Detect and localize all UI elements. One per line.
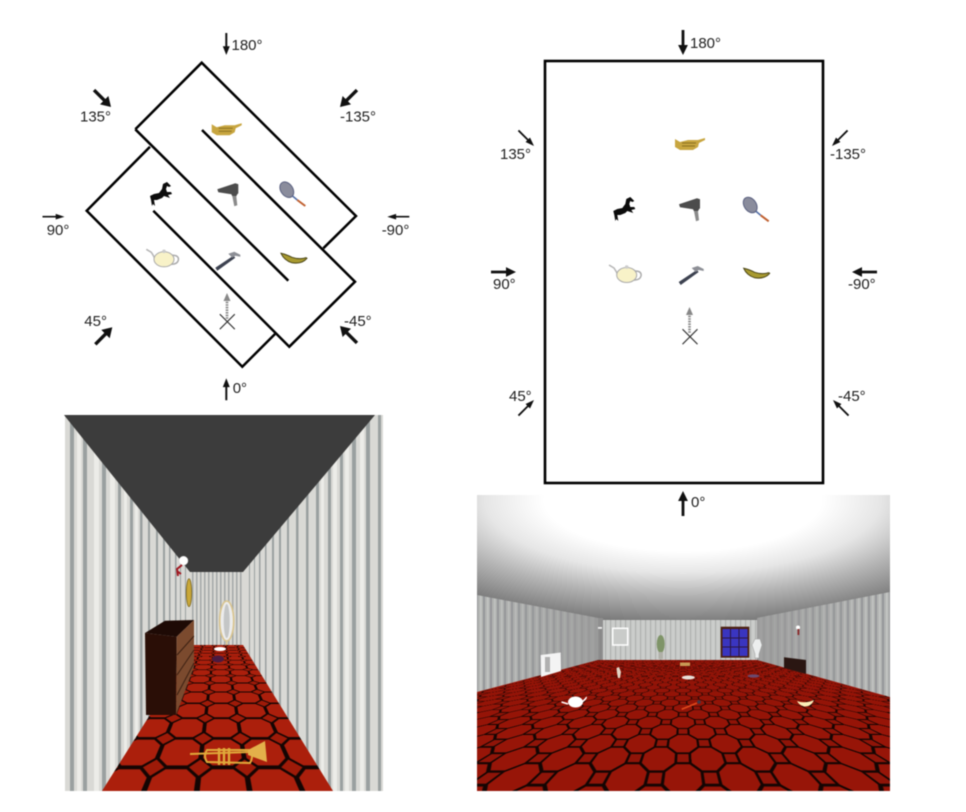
corridor carpet floor — [102, 644, 334, 792]
left map angle labels — [47, 37, 409, 397]
room: hammer on floor — [682, 700, 701, 709]
right map angle labels: 180° — [690, 35, 721, 52]
right room map outline — [545, 61, 823, 483]
room: trumpet on floor — [680, 662, 690, 666]
room: racket on floor — [748, 674, 760, 678]
open room view: ceiling and walls — [477, 495, 890, 697]
room: banana on floor — [797, 700, 814, 707]
room: radiator — [541, 652, 561, 677]
room: wall lamp — [796, 626, 800, 635]
dresser in corridor — [145, 620, 194, 715]
left map angle labels: 0° — [233, 380, 247, 397]
purple object on floor — [212, 656, 224, 662]
right map objects — [609, 138, 770, 344]
left map angle labels: 135° — [80, 109, 111, 126]
right map angle labels: -90° — [848, 276, 876, 293]
right map angle labels: 90° — [493, 276, 516, 293]
left map angle labels: 45° — [84, 313, 107, 330]
room: far carpet haze — [477, 660, 890, 730]
trumpet on corridor floor — [190, 741, 267, 765]
room: vase — [752, 639, 762, 658]
left map objects — [146, 123, 307, 329]
white plate on floor — [214, 647, 226, 651]
right map angle labels: -45° — [838, 388, 866, 405]
left map angle labels: -90° — [382, 222, 409, 239]
right map arrows — [491, 30, 877, 516]
left map angle labels: -45° — [344, 313, 372, 330]
right map angle labels: 45° — [509, 388, 532, 405]
corridor view: walls and ceiling — [64, 415, 383, 791]
room: hair dryer on floor — [682, 676, 695, 680]
room: potted plant — [657, 635, 665, 659]
left map arrows — [42, 33, 409, 400]
room: horse on floor — [616, 667, 621, 678]
right map angle labels — [493, 35, 876, 511]
left map angle labels: 180° — [232, 37, 263, 54]
left map angle labels: 90° — [47, 222, 69, 239]
right map angle labels: 0° — [691, 494, 705, 511]
room: floor lamp — [598, 627, 602, 660]
room: window — [721, 627, 749, 658]
room: black cabinet — [784, 657, 806, 674]
wall lamp in corridor — [177, 556, 188, 576]
room carpet floor — [476, 660, 891, 792]
right map angle labels: 135° — [500, 146, 531, 163]
room: teapot on floor — [562, 696, 586, 708]
room: picture frame — [613, 628, 628, 645]
left corridor map outline — [87, 63, 356, 367]
standing mirror — [220, 601, 234, 645]
right map angle labels: -135° — [830, 146, 866, 163]
left map angle labels: -135° — [340, 109, 376, 126]
gold wall plaque — [186, 579, 192, 607]
